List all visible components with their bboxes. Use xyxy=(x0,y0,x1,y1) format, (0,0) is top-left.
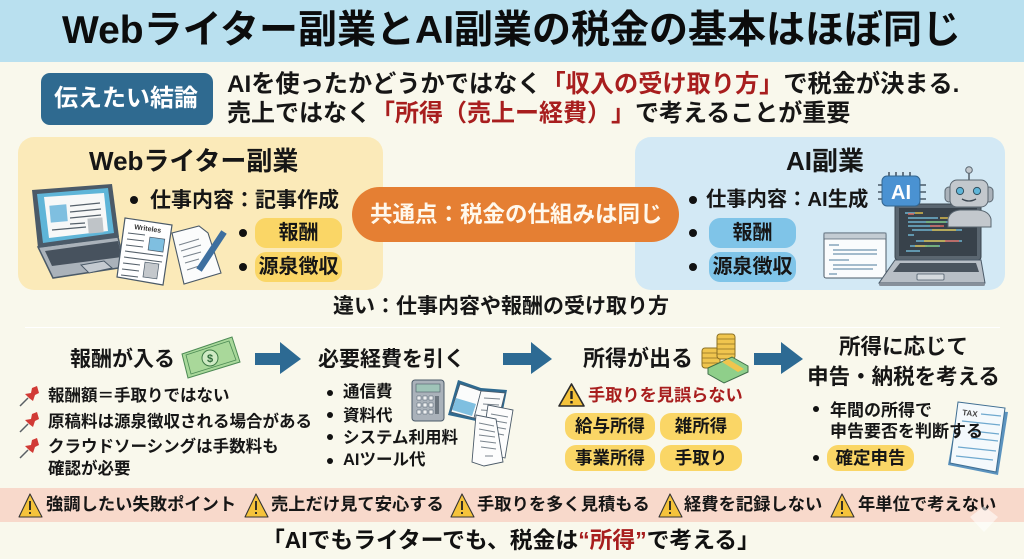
step 3 warning: 手取りを見誤らない xyxy=(588,385,743,405)
icon: calculator xyxy=(412,380,444,422)
list: Webライター xyxy=(130,188,342,282)
step 4 heading: 所得に応じて xyxy=(839,335,968,359)
icon: AI chip xyxy=(878,172,926,206)
warning band: 年単位で考えない xyxy=(858,494,996,514)
title banner xyxy=(0,0,1024,62)
step 4 list: 年間の所得で xyxy=(830,401,932,420)
arrow 1 xyxy=(255,342,301,374)
icon: AI chip: AI xyxy=(891,182,911,204)
arrow 3 xyxy=(754,342,803,374)
conclusion label: 伝えたい結論 xyxy=(54,85,198,112)
step 2 bullet list xyxy=(327,382,458,469)
arrow 2 xyxy=(503,342,552,374)
list: AI副業 xyxy=(689,188,868,282)
closing statement: 「AIでもライターでも、税金は“所得”で考える」 xyxy=(262,527,760,553)
step 3 income pills: 手取り xyxy=(675,448,727,468)
difference heading: 違い：仕事内容や報酬の受け取り方 xyxy=(333,295,669,318)
step 3 income pills: 事業所得 xyxy=(575,448,645,468)
icon: laptop with code xyxy=(878,204,986,286)
icon: article papers and pen xyxy=(116,217,227,286)
icon: robot xyxy=(944,166,994,228)
step 4 list xyxy=(813,401,983,471)
list: AI副業: 仕事内容：AI生成 xyxy=(706,189,868,211)
panel: Webライター副業 xyxy=(18,137,383,290)
step 1 pin list xyxy=(20,386,312,478)
icon: warning xyxy=(558,383,585,407)
icon: banknote: $ xyxy=(207,353,213,365)
step 3 income pills: 給与所得 xyxy=(575,416,645,436)
list: Webライター: 報酬 xyxy=(278,222,318,244)
conclusion text xyxy=(227,70,959,127)
panel heading: AI副業: AI副業 xyxy=(786,146,864,176)
conclusion label xyxy=(41,73,213,125)
step 1 pin list: クラウドソーシングは手数料も xyxy=(48,438,279,456)
icon: receipts xyxy=(472,404,514,466)
icon: laptop with article xyxy=(32,184,121,279)
step 1 pin list: 確認が必要 xyxy=(48,460,130,478)
common point pill xyxy=(352,187,679,242)
step 4 list: 申告要否を判断する xyxy=(830,422,983,441)
warning band: 強調したい失敗ポイント xyxy=(46,494,236,514)
warning band: 経費を記録しない xyxy=(684,494,822,514)
step 2 bullet list: 資料代 xyxy=(343,407,392,425)
list: Webライター: 源泉徴収 xyxy=(258,256,338,278)
step 2 bullet list: 通信費 xyxy=(343,383,392,401)
icon: tax form: TAX xyxy=(962,408,979,419)
step 3 income pills xyxy=(565,413,742,471)
icon: ledger book xyxy=(448,380,507,421)
panel: AI副業 xyxy=(635,137,1005,290)
icon: banknote xyxy=(181,336,241,379)
conclusion text: AIを使ったかどうかではなく「収入の受け取り方」で税金が決まる. xyxy=(227,71,959,98)
step 3 heading: 所得が出る xyxy=(583,346,693,371)
warning band: 手取りを多く見積もる xyxy=(477,494,650,514)
list: AI副業: 報酬 xyxy=(732,222,772,244)
list: AI副業: 源泉徴収 xyxy=(712,256,792,278)
step 4 heading: 申告・納税を考える xyxy=(807,365,1000,389)
step 1 pin list: 報酬額＝手取りではない xyxy=(48,387,230,405)
step 4 heading xyxy=(807,335,1000,389)
common point pill: 共通点：税金の仕組みは同じ xyxy=(370,202,663,227)
step 3 warning xyxy=(558,383,743,407)
warning band xyxy=(0,488,1024,522)
step 1 pin list: 原稿料は源泉徴収される場合がある xyxy=(48,413,312,431)
step 2 heading: 必要経費を引く xyxy=(318,348,465,371)
icon: pins xyxy=(20,386,39,458)
panel heading: Webライター副業: Webライター副業 xyxy=(89,146,298,176)
title: Webライター副業とAI副業の税金の基本はほぼ同じ xyxy=(62,9,961,52)
icon: article papers and pen: Writeles xyxy=(134,224,162,235)
icon: coins and cash xyxy=(702,334,748,384)
step 3 income pills: 雑所得 xyxy=(675,416,727,436)
warning band: 売上だけ見て安心する xyxy=(271,494,444,514)
step 2 bullet list: AIツール代 xyxy=(343,451,426,469)
list: Webライター: 仕事内容：記事作成 xyxy=(150,189,339,212)
step 2 bullet list: システム利用料 xyxy=(343,429,458,447)
icon: code window xyxy=(824,232,886,278)
step 1 heading: 報酬が入る xyxy=(70,348,175,371)
step 4 list: 確定申告 xyxy=(836,448,906,468)
conclusion text: 売上ではなく「所得（売上ー経費）」で考えることが重要 xyxy=(227,100,850,127)
